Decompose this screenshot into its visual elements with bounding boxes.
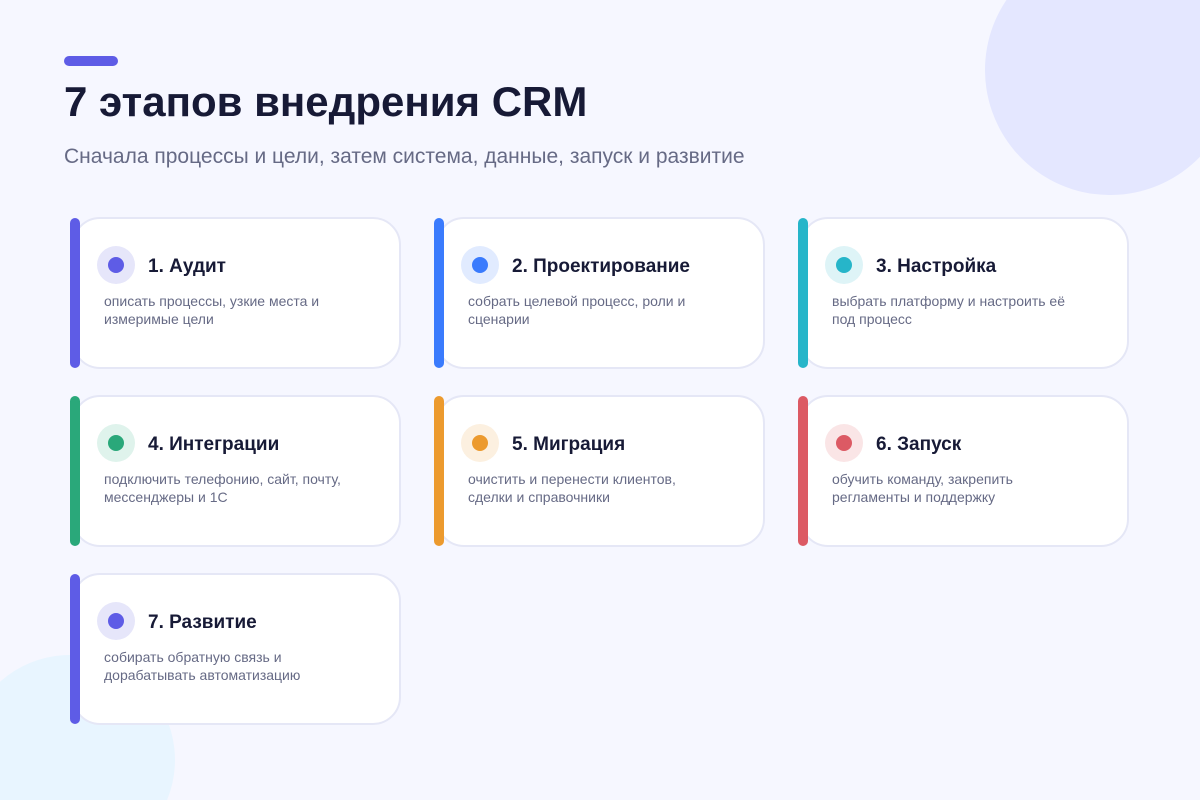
text: step 3 bbox=[832, 293, 1065, 327]
text: step 4: подключить телефонию, сайт, почту, bbox=[104, 471, 341, 487]
text: step 5: очистить и перенести клиентов, bbox=[468, 471, 676, 487]
text: step 5 bbox=[468, 471, 676, 505]
decorative circle: bottom left bbox=[0, 655, 175, 800]
decorative circle: top right bbox=[985, 0, 1200, 195]
text: step 3: выбрать платформу и настроить её bbox=[832, 293, 1065, 309]
heading: step 2: 2. Проектирование bbox=[512, 256, 690, 277]
title accent bar bbox=[64, 56, 118, 66]
panel: step 2 bbox=[434, 217, 765, 369]
panel: step 5 bbox=[434, 395, 765, 547]
panel: step 7 bbox=[70, 573, 401, 725]
text: step 7: собирать обратную связь и bbox=[104, 649, 282, 665]
text: step 6: регламенты и поддержку bbox=[832, 489, 995, 505]
panel: step 3 bbox=[798, 217, 1129, 369]
text: step 5: сделки и справочники bbox=[468, 489, 610, 505]
subtitle: Сначала процессы и цели, затем система, данные, запуск и развитие bbox=[64, 145, 745, 168]
text: step 6: обучить команду, закрепить bbox=[832, 471, 1013, 487]
heading: step 3: 3. Настройка bbox=[876, 256, 996, 277]
text: step 7: дорабатывать автоматизацию bbox=[104, 667, 300, 683]
text: step 1: измеримые цели bbox=[104, 311, 214, 327]
panel: step 1 bbox=[70, 217, 401, 369]
heading: step 5: 5. Миграция bbox=[512, 434, 625, 455]
text: step 2: собрать целевой процесс, роли и bbox=[468, 293, 685, 309]
heading: step 4: 4. Интеграции bbox=[148, 434, 279, 455]
title: 7 этапов внедрения CRM bbox=[64, 78, 587, 125]
text: step 3: под процесс bbox=[832, 311, 912, 327]
text: step 2: сценарии bbox=[468, 311, 530, 327]
text: step 4 bbox=[104, 471, 341, 505]
text: step 7 bbox=[104, 649, 300, 683]
text: step 1 bbox=[104, 293, 319, 327]
text: step 2 bbox=[468, 293, 685, 327]
text: step 6 bbox=[832, 471, 1013, 505]
text: step 4: мессенджеры и 1С bbox=[104, 489, 228, 505]
heading: step 1: 1. Аудит bbox=[148, 256, 226, 277]
panel: step 6 bbox=[798, 395, 1129, 547]
text: step 1: описать процессы, узкие места и bbox=[104, 293, 319, 309]
heading: step 7: 7. Развитие bbox=[148, 612, 257, 633]
panel: step 4 bbox=[70, 395, 401, 547]
heading: step 6: 6. Запуск bbox=[876, 434, 961, 455]
